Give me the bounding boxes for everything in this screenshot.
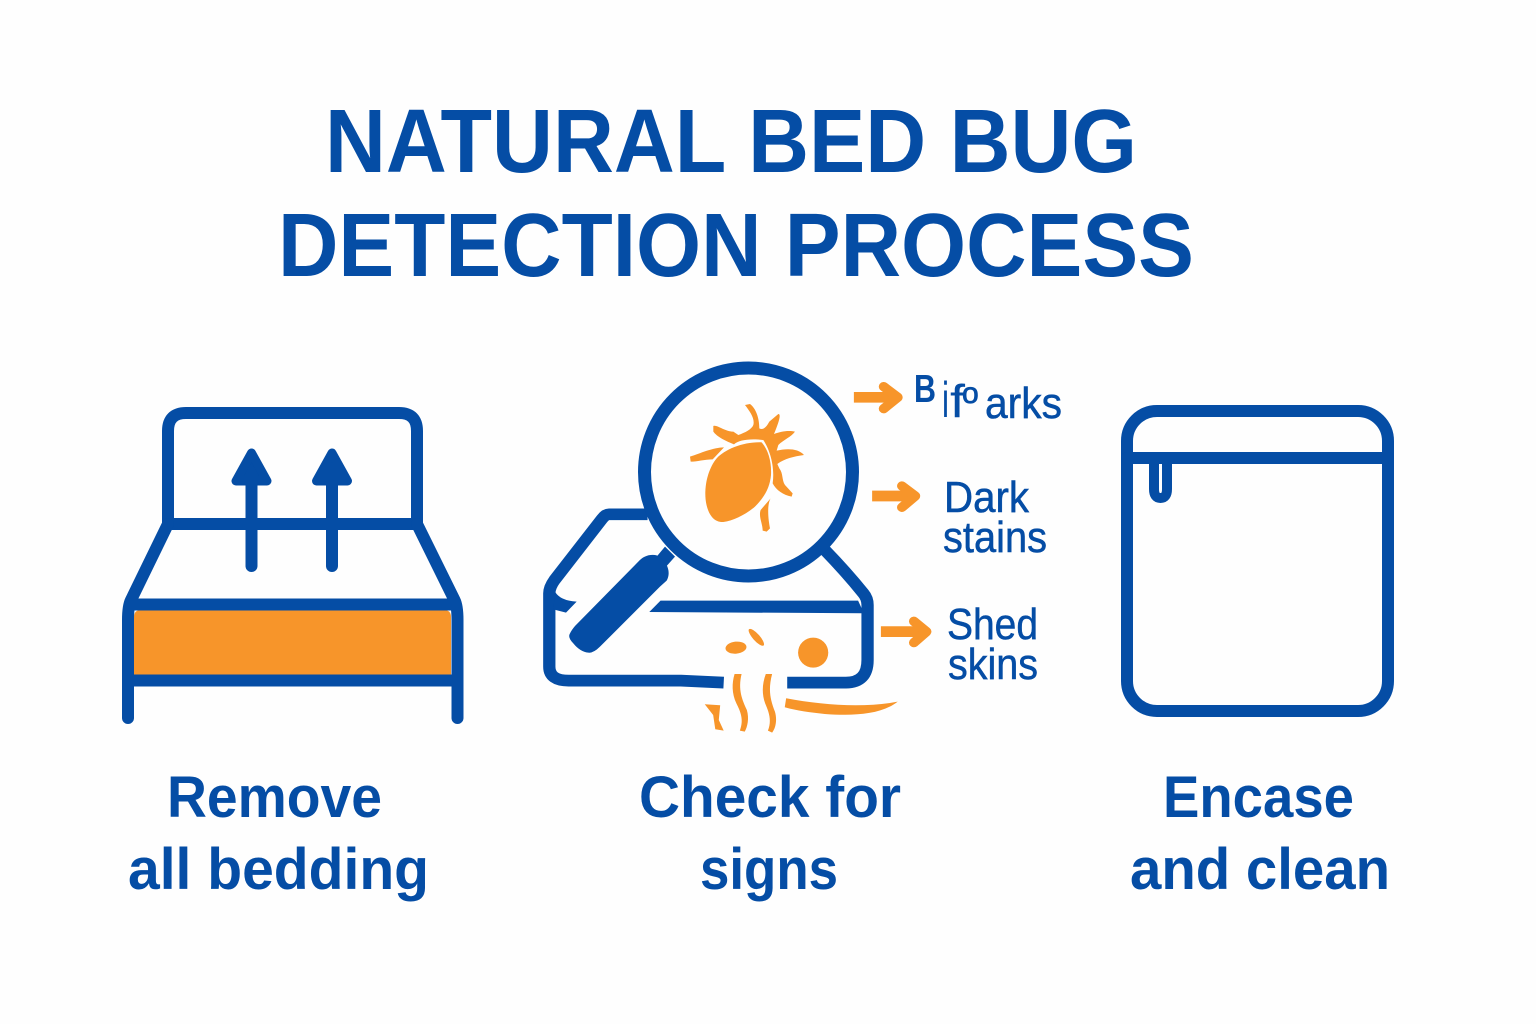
panel: encase and clean (1127, 411, 1390, 902)
title: NATURAL BED BUG (325, 92, 1137, 192)
label: check for signs: Check for (639, 765, 901, 830)
magnifier handle (569, 547, 675, 653)
text: dark stains (943, 473, 1047, 562)
text: shed skins (947, 600, 1038, 689)
arrow: to dark stains (872, 486, 915, 507)
panel: check for signs (549, 368, 1062, 902)
icon: mattress under magnifying glass (549, 368, 898, 733)
text: shed skins: Shed (947, 600, 1038, 649)
text: bifo arks: o (962, 377, 979, 410)
label: encase and clean: Encase (1163, 765, 1354, 830)
text: bifo arks: B (914, 368, 936, 411)
icon: bed with up arrows (128, 413, 458, 718)
text: bifo arks: f (950, 375, 965, 427)
label: check for signs (639, 765, 901, 902)
arrow: to bifo arks (854, 387, 898, 409)
arrow: to shed skins (881, 621, 927, 643)
label: remove all bedding (128, 765, 429, 902)
label: remove all bedding: Remove (167, 765, 382, 830)
text: bifo arks: i (942, 372, 949, 428)
text: bifo arks (914, 368, 1062, 428)
text: dark stains: Dark (944, 473, 1030, 522)
icon: bed bug (690, 404, 804, 532)
title (278, 92, 1194, 296)
text: bifo arks: arks (985, 379, 1062, 428)
label: encase and clean (1130, 765, 1390, 902)
mattress corner piece (553, 592, 577, 613)
icon: zippered encasement (1127, 411, 1388, 711)
magnifier lens (644, 368, 852, 576)
label: encase and clean: and clean (1130, 837, 1390, 902)
title: DETECTION PROCESS (278, 196, 1194, 296)
label: check for signs: signs (700, 837, 838, 902)
label: remove all bedding: all bedding (128, 837, 429, 902)
mattress outline (549, 514, 868, 683)
panel: remove all bedding (128, 413, 458, 902)
text: shed skins: skins (948, 640, 1038, 689)
text: dark stains: stains (943, 513, 1047, 562)
icon: droppings and stains (705, 627, 898, 733)
